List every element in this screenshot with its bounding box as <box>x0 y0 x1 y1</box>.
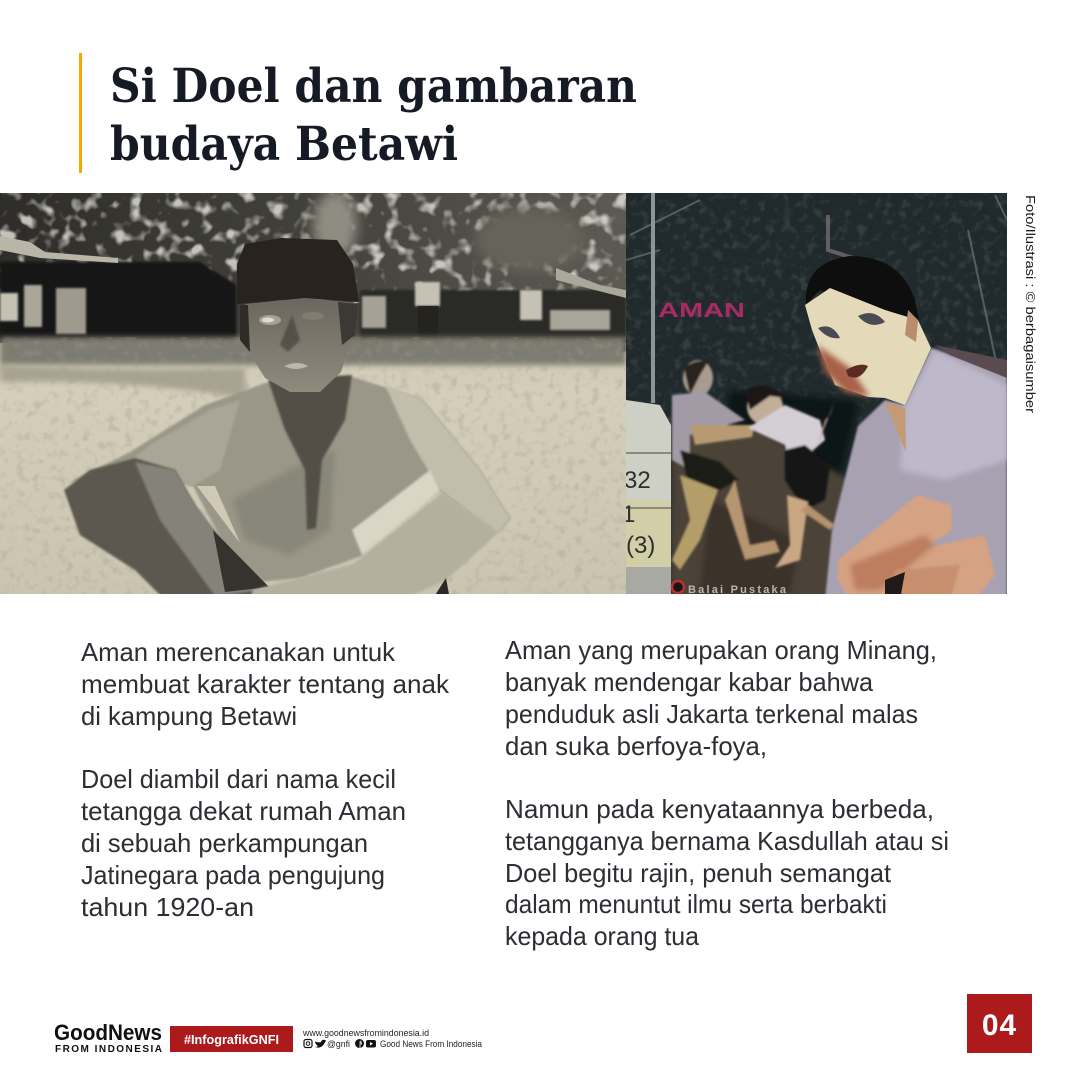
background people <box>0 282 610 334</box>
footer logo: GoodNews <box>54 1020 162 1045</box>
footer logo <box>54 1020 162 1055</box>
left text column: tahun 1920-an <box>81 892 254 922</box>
right text column: Aman yang merupakan orang Minang, <box>505 635 937 665</box>
boy: shirt <box>68 377 510 582</box>
icon: facebook <box>355 1039 364 1048</box>
small boy right <box>745 385 835 568</box>
icon: instagram <box>304 1040 312 1048</box>
right text column: Doel begitu rajin, penuh semangat <box>505 858 892 888</box>
large boy arms <box>838 495 995 600</box>
right text column: tetangganya bernama Kasdullah atau si <box>505 826 949 856</box>
left text column: tetangga dekat rumah Aman <box>81 796 406 826</box>
left text column: di sebuah perkampungan <box>81 828 368 858</box>
boy: head <box>245 298 357 392</box>
footer contact info: www.goodnewsfromindonesia.id <box>302 1028 429 1038</box>
right text column: dan suka berfoya-foya, <box>505 731 767 761</box>
title: Si Doel dan gambaran <box>110 59 637 114</box>
boy: hat <box>237 238 359 304</box>
right text column: dalam menuntut ilmu serta berbakti <box>505 889 887 919</box>
grass <box>0 337 626 365</box>
icon: twitter <box>315 1040 326 1048</box>
left text column <box>81 637 450 922</box>
page number: 04 <box>982 1009 1017 1042</box>
illustration: book cover Aman: 32 <box>624 467 651 494</box>
boy: left arm and knee <box>64 458 260 600</box>
title <box>110 59 637 172</box>
hashtag badge <box>170 1026 293 1052</box>
boy: neck and placket <box>268 375 352 530</box>
large boy hair <box>806 256 920 324</box>
left text column: membuat karakter tentang anak <box>81 669 450 699</box>
publisher mark <box>672 581 684 593</box>
illustration: book cover Aman: Balai Pustaka <box>688 584 787 596</box>
footer contact info: @gnfi <box>327 1039 350 1049</box>
ground <box>670 430 850 600</box>
right text column <box>505 635 949 951</box>
illustration: book cover Aman <box>622 193 1007 600</box>
footer logo: FROM INDONESIA <box>55 1044 162 1055</box>
large boy shirt <box>825 348 1007 600</box>
title: budaya Betawi <box>110 117 458 172</box>
title accent bar <box>79 53 82 173</box>
shelter and dark hedge <box>0 262 236 340</box>
left text column: Doel diambil dari nama kecil <box>81 764 396 794</box>
illustration: book cover Aman: 1 <box>622 501 635 528</box>
footer contact info <box>302 1028 482 1049</box>
hashtag badge: #InfografikGNFI <box>184 1033 279 1047</box>
dark shade behind boys <box>724 388 862 475</box>
boy: right arm and hands <box>250 493 498 600</box>
photo credit: Foto/Ilustrasi : © berbagaisumber <box>1023 195 1037 413</box>
icon: youtube <box>366 1040 376 1048</box>
photo: boy sitting on the ground <box>0 191 626 600</box>
illustration: book cover Aman: (3) <box>626 532 655 559</box>
right text column: Namun pada kenyataannya berbeda, <box>505 794 934 824</box>
library label <box>626 400 671 500</box>
branches and pole <box>626 194 1007 358</box>
right text column: banyak mendengar kabar bahwa <box>505 667 874 697</box>
large boy face <box>805 288 931 405</box>
left text column: Jatinegara pada pengujung <box>81 860 385 890</box>
left text column: Aman merencanakan untuk <box>81 637 396 667</box>
small boy left <box>672 360 780 570</box>
right text column: kepada orang tua <box>505 921 700 951</box>
AMAN lettering: AMAN <box>658 300 745 322</box>
page number <box>967 994 1032 1053</box>
left text column: di kampung Betawi <box>81 701 297 731</box>
footer contact info: Good News From Indonesia <box>380 1039 482 1049</box>
right text column: penduduk asli Jakarta terkenal malas <box>505 699 918 729</box>
